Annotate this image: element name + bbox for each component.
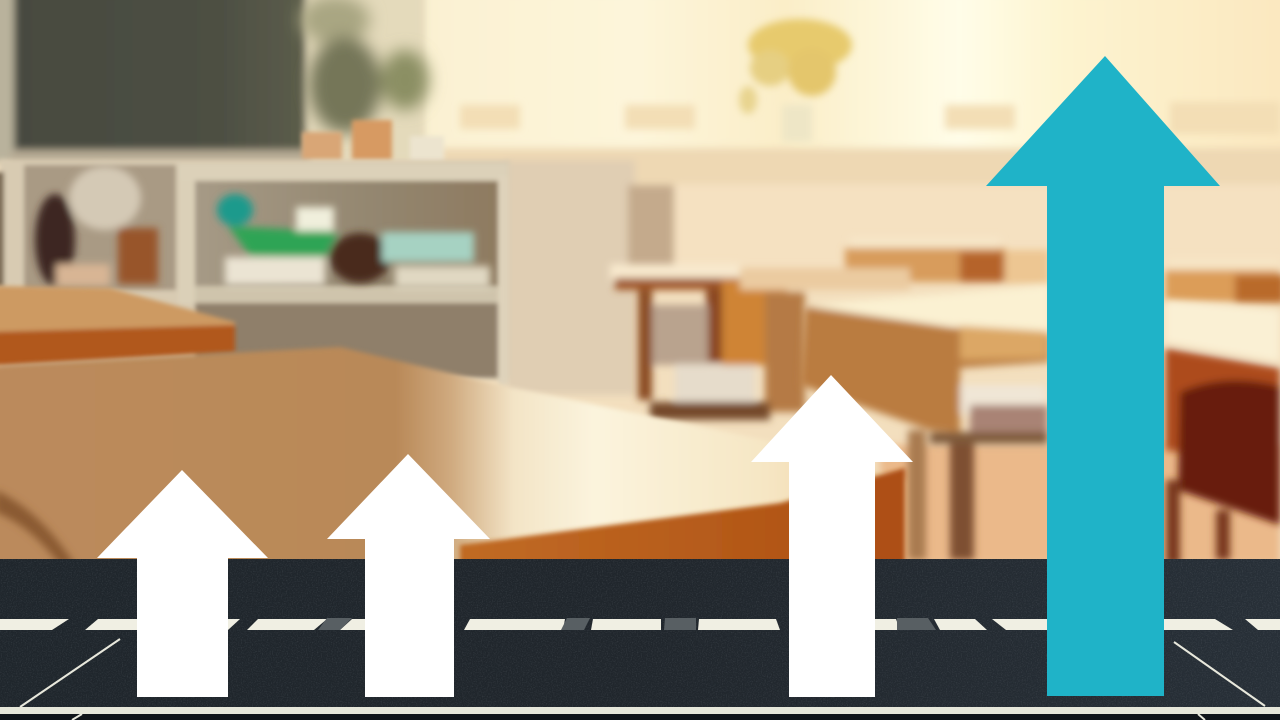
floor — [880, 445, 1280, 565]
near left desk — [0, 286, 235, 366]
worn lane patches — [318, 618, 936, 630]
lane dashes — [0, 619, 1280, 630]
arrow 2: white — [327, 454, 490, 697]
road — [0, 559, 1280, 720]
arrow 4: teal, tallest — [986, 56, 1220, 696]
foreground table — [0, 347, 905, 570]
shelf objects — [35, 166, 490, 288]
window curtains and wall — [420, 0, 1280, 395]
classroom background photo — [0, 0, 1280, 570]
side road lines — [20, 639, 1265, 720]
yellow flowers — [739, 19, 852, 142]
front right desk — [800, 285, 1280, 565]
back desks — [610, 238, 1280, 420]
plant pots — [302, 120, 444, 162]
arrow 1: white — [97, 470, 268, 697]
arrow 3: white — [751, 375, 913, 697]
potted plants — [300, 0, 429, 133]
chalkboard — [0, 0, 425, 164]
shelves — [0, 160, 510, 386]
window ledge pattern — [460, 102, 1280, 134]
